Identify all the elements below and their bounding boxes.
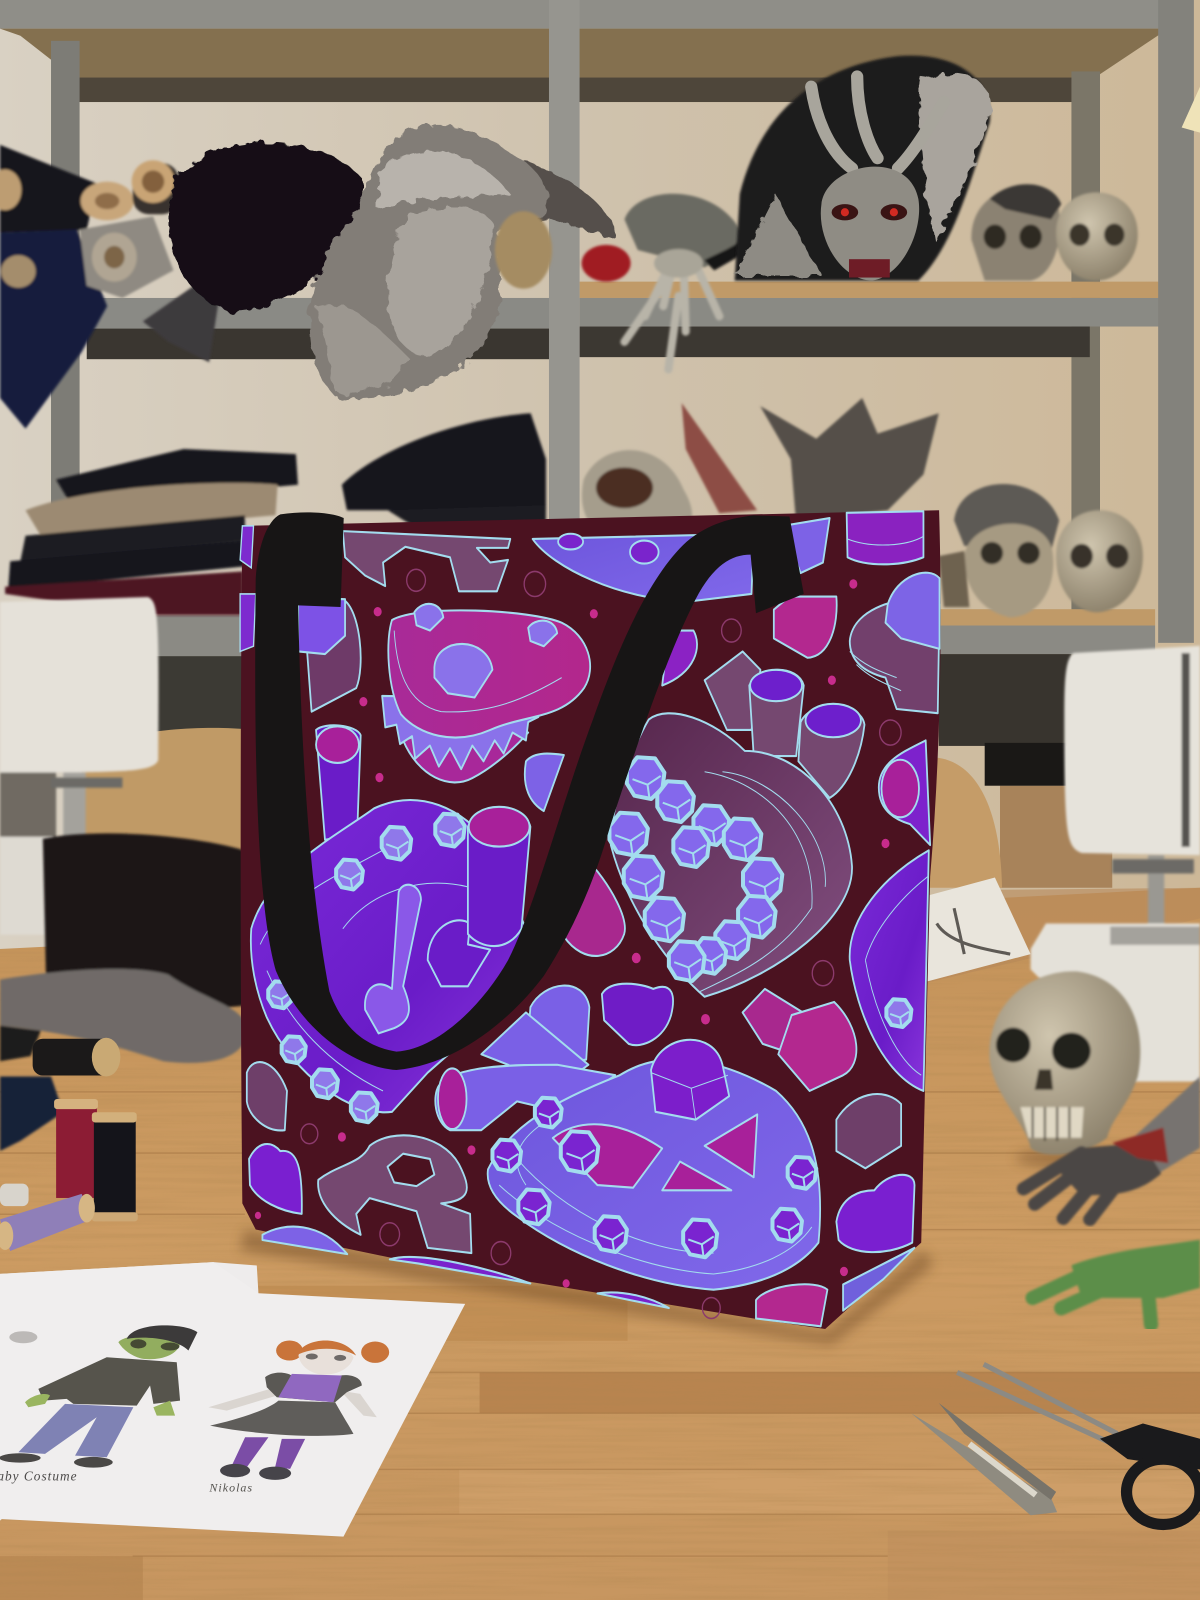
black fur bundle <box>168 143 363 311</box>
grey fur bundle <box>309 125 617 399</box>
bottom right blue strip <box>843 1248 915 1311</box>
black and grey fabric on the table <box>0 833 250 1151</box>
workshop wall background <box>0 0 1200 969</box>
pencil sketch sheet <box>927 878 1031 982</box>
large purple heart disc <box>251 725 530 1122</box>
magenta heart beside strap <box>564 866 625 956</box>
doll caption: Nikolas <box>208 1480 253 1494</box>
folded fabric stacks <box>5 413 546 615</box>
pendant lamp corner <box>1182 87 1200 133</box>
mauve cup left <box>247 1062 287 1130</box>
props on the middle shelf <box>582 398 939 536</box>
skeleton hand prop <box>624 194 753 369</box>
bottom purple strip <box>390 1257 530 1283</box>
blue pipe assembly <box>435 986 615 1130</box>
mauve cup right <box>836 1094 901 1168</box>
bottom left blue shape <box>262 1227 347 1254</box>
table shadows under bag and skull <box>240 1149 1128 1345</box>
metal shelving unit <box>0 0 1194 888</box>
purple heart bottom left <box>249 1144 302 1214</box>
wrench hex hole <box>387 1154 434 1186</box>
small purple heart <box>602 984 673 1045</box>
magenta heart gear <box>382 604 590 782</box>
bag left side gusset sliver <box>240 526 256 651</box>
magenta windows <box>553 1124 662 1188</box>
magenta heart top right <box>774 597 837 658</box>
small magenta cup near strap <box>662 631 697 685</box>
grey zombie hand prop <box>1023 1077 1200 1219</box>
wooden chair backs <box>82 728 1002 888</box>
bottom magenta cup <box>756 1284 827 1326</box>
left cup piece <box>298 599 361 712</box>
fabric rolls on the upper left shelf <box>0 145 219 429</box>
outlined hearts <box>301 569 901 1318</box>
devil mask with horns and hair <box>735 56 990 281</box>
scissors and thread snips <box>911 1364 1200 1524</box>
purple disc bolts <box>268 814 465 1122</box>
skulls on the upper shelf <box>971 184 1138 281</box>
mauve heart disc with bolt ring <box>609 651 864 997</box>
skulls on the lower right shelf <box>939 484 1143 617</box>
doll girl drawing <box>208 1341 389 1480</box>
top blue disc <box>533 534 754 602</box>
red prop <box>582 245 631 282</box>
small scattered hearts <box>255 579 890 1288</box>
top right cups <box>783 511 923 573</box>
green zombie hand prop <box>1033 1240 1200 1324</box>
left sewing machine <box>0 597 158 935</box>
zombie boy drawing <box>0 1325 197 1468</box>
tote bag with printed pattern <box>240 510 941 1329</box>
black strap handle <box>255 512 804 1070</box>
wrench lever <box>365 885 421 1033</box>
bag body <box>241 510 941 1329</box>
big hex bolt <box>651 1040 729 1120</box>
right magenta circle <box>879 740 930 845</box>
purple heart bottom right <box>836 1175 915 1252</box>
right purple disc <box>850 850 929 1091</box>
small blue cup <box>525 754 564 811</box>
paper sheets <box>0 1262 465 1537</box>
bottom left wrench <box>318 1135 471 1253</box>
blue heart disc with bolts <box>488 1040 820 1290</box>
large skull on the table <box>989 971 1140 1155</box>
tan fabric roll <box>495 211 552 289</box>
right stacked mauve piece <box>850 573 940 713</box>
right sewing machine <box>1031 646 1200 1082</box>
scribble mark <box>9 1331 37 1343</box>
top wrench shape <box>343 531 510 591</box>
bolt ring <box>609 757 782 981</box>
wooden work table <box>0 888 1200 1600</box>
costume sketch papers <box>0 1262 465 1537</box>
small bolts <box>492 1098 816 1257</box>
magenta hex bolt <box>743 989 856 1091</box>
thread spools <box>0 1038 138 1251</box>
